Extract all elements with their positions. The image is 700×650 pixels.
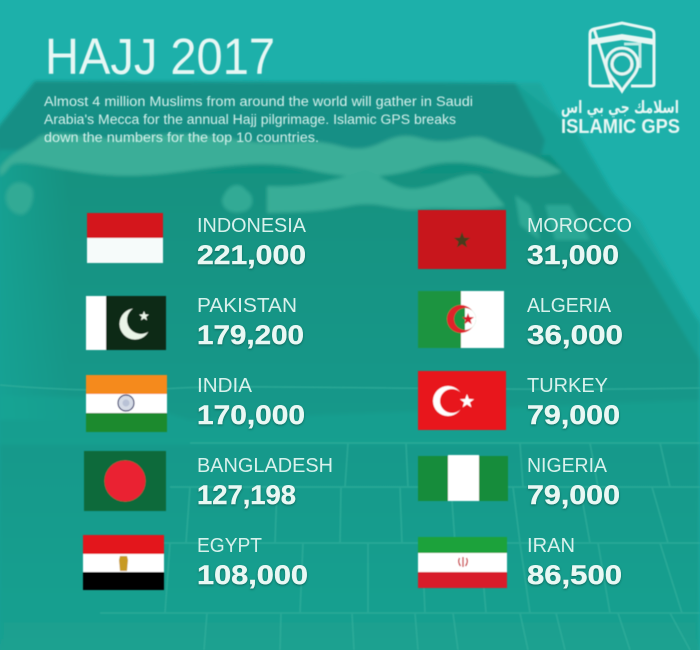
label and number	[527, 215, 632, 270]
label and number	[197, 215, 307, 270]
intro text: Arabia's Mecca for the annual Hajj pilgrimage. Islamic GPS breaks	[44, 112, 456, 127]
label and number: 31,000	[527, 240, 619, 270]
row: Pakistan	[86, 295, 304, 350]
label and number	[527, 295, 623, 350]
label and number	[197, 375, 305, 430]
label and number: IRAN	[527, 535, 575, 557]
lighter outer slope	[500, 83, 700, 650]
kiswah band upper	[0, 133, 562, 177]
row: Indonesia	[87, 213, 307, 270]
row: India	[86, 375, 305, 432]
label and number: 221,000	[197, 240, 306, 270]
title: HAJJ 2017	[45, 28, 275, 85]
label and number: PAKISTAN	[197, 295, 297, 317]
row: Algeria	[418, 291, 623, 350]
flag: Iran	[418, 537, 507, 588]
logo Latin name: ISLAMIC GPS	[561, 116, 680, 138]
flag: Indonesia	[87, 213, 163, 263]
label and number: NIGERIA	[527, 455, 608, 477]
row: Morocco	[418, 210, 632, 270]
kiswah band lower	[267, 170, 505, 213]
label and number	[527, 535, 622, 590]
flag: Pakistan	[86, 296, 166, 350]
label and number: 36,000	[527, 320, 623, 350]
label and number	[197, 535, 308, 590]
row: Iran	[418, 535, 622, 590]
flag: Bangladesh	[84, 451, 166, 511]
label and number: 179,200	[197, 320, 304, 350]
kiswah medallions	[6, 182, 33, 215]
intro text	[44, 94, 473, 145]
label and number	[527, 375, 620, 430]
label and number: 108,000	[197, 560, 308, 590]
flag: Turkey	[418, 371, 506, 430]
row: Bangladesh	[84, 451, 333, 511]
label and number: INDIA	[197, 375, 253, 397]
intro text: Almost 4 million Muslims from around the world will gather in Saudi	[44, 94, 473, 109]
label and number: ALGERIA	[527, 295, 612, 317]
flag: India	[86, 375, 167, 432]
label and number: 79,000	[527, 400, 620, 430]
intro text: down the numbers for the top 10 countries.	[44, 130, 319, 145]
flag: Morocco	[418, 210, 506, 269]
label and number: INDONESIA	[197, 215, 307, 237]
label and number	[527, 455, 620, 510]
label and number	[197, 455, 333, 510]
row: Egypt	[83, 535, 308, 590]
lighter floor edge	[0, 395, 700, 445]
flag: Nigeria	[418, 455, 508, 501]
label and number	[197, 295, 304, 350]
row: Nigeria	[418, 455, 620, 510]
icon: Kaaba with location pin	[590, 23, 654, 91]
label and number: EGYPT	[197, 535, 262, 557]
flag: Algeria	[418, 291, 504, 348]
label and number: 79,000	[527, 480, 620, 510]
logo: Islamic GPS	[561, 23, 680, 138]
label and number: 86,500	[527, 560, 622, 590]
label and number: 170,000	[197, 400, 305, 430]
label and number: 127,198	[197, 480, 296, 510]
label and number: TURKEY	[527, 375, 608, 397]
label and number: MOROCCO	[527, 215, 632, 237]
label and number: BANGLADESH	[197, 455, 333, 477]
flag: Egypt	[83, 535, 164, 590]
row: Turkey	[418, 371, 620, 430]
